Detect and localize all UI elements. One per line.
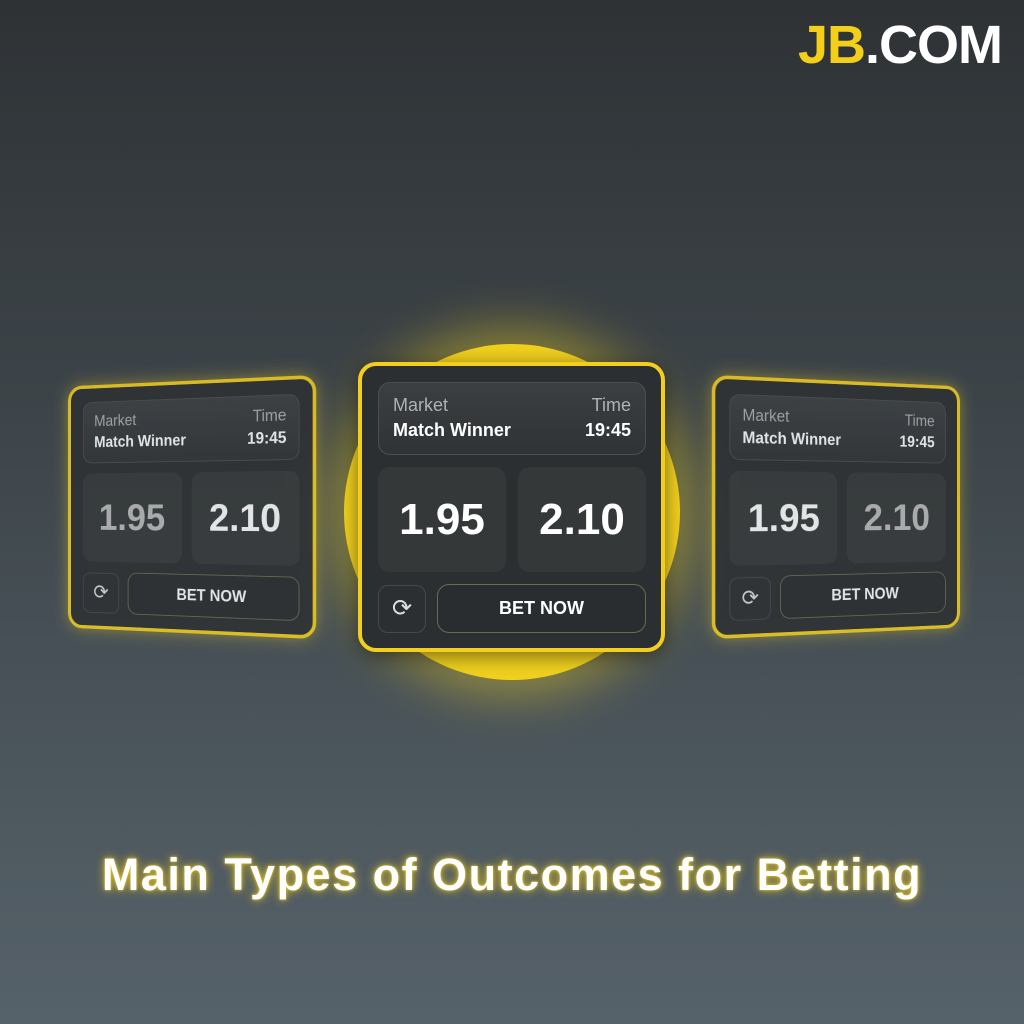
odds [83, 472, 182, 563]
card: right: 2.10 [864, 497, 930, 539]
logo: JB.COM [798, 15, 1002, 75]
header: Time [905, 412, 935, 430]
title: Main Types of Outcomes for Betting [102, 849, 922, 900]
header: Market [94, 411, 136, 430]
button: BET NOW [831, 585, 899, 604]
refresh: ⟳ [742, 586, 759, 611]
header: Market [393, 395, 448, 415]
header: Time [592, 395, 631, 415]
header: 19:45 [247, 429, 286, 447]
button [780, 571, 946, 619]
header: 19:45 [899, 433, 935, 451]
header [83, 394, 299, 463]
button [437, 584, 646, 633]
button [128, 573, 299, 621]
card: right [712, 375, 960, 639]
card: left [68, 375, 316, 639]
refresh: ⟳ [392, 595, 412, 622]
odds: 1.95 [99, 497, 165, 539]
glow circle [344, 344, 680, 680]
header [378, 382, 646, 455]
header [729, 394, 946, 463]
odds: 1.95 [399, 495, 485, 544]
header: 19:45 [585, 420, 631, 440]
header: Market [742, 406, 789, 425]
odds: 1.95 [748, 496, 820, 540]
odds [729, 471, 837, 566]
odds [378, 467, 506, 572]
card: center [358, 362, 665, 652]
card: center: 2.10 [539, 495, 625, 544]
header: Time [253, 406, 286, 425]
refresh [83, 572, 119, 614]
button: BET NOW [499, 598, 584, 618]
header: Match Winner [94, 431, 186, 451]
header: Match Winner [742, 429, 841, 449]
card: left: 2.10 [209, 496, 281, 540]
button: BET NOW [176, 586, 246, 606]
refresh: ⟳ [93, 581, 109, 604]
header: Match Winner [393, 420, 511, 440]
refresh [729, 577, 771, 621]
refresh [378, 585, 426, 633]
